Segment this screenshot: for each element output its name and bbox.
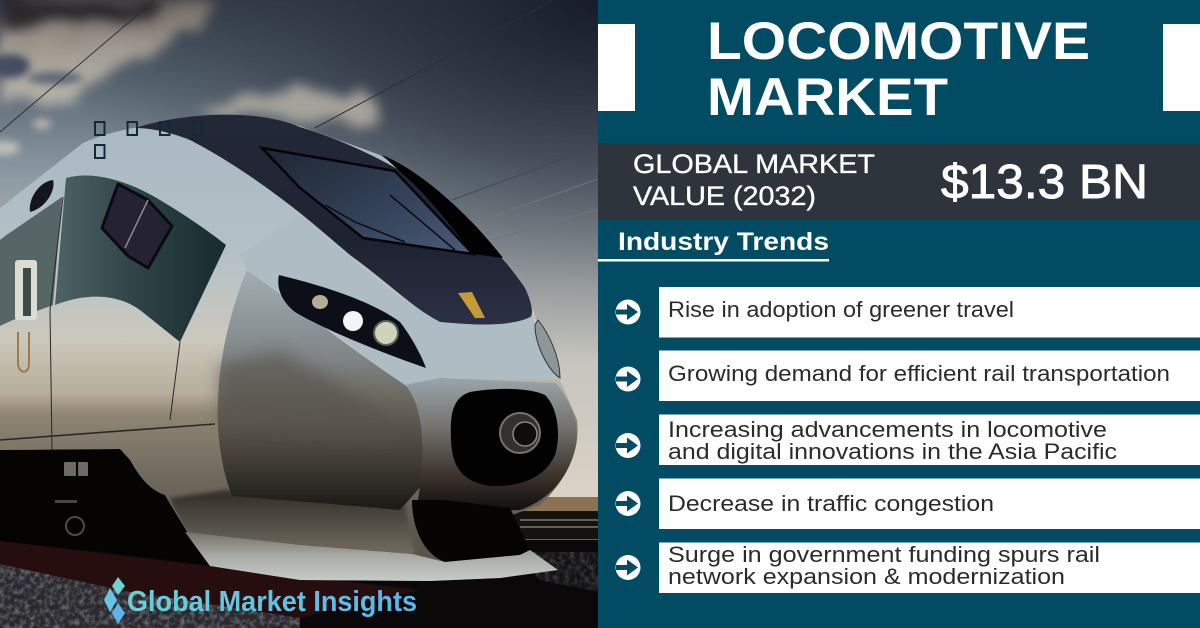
lower nose [405,378,577,512]
overhead wires [0,0,598,240]
rear side panel [0,197,62,326]
right white accent [1163,24,1200,111]
window divider [125,200,148,248]
cloud reflection on panel [210,345,360,417]
left white accent [598,24,635,111]
front skirt [185,532,558,581]
camera lens [500,413,540,453]
title [707,12,1090,127]
under-body bogie [0,449,191,542]
body seams [0,197,215,450]
trend text: and digital innovations in the Asia Pacific [668,439,1117,464]
door handle [15,260,37,320]
trend row 5 [616,542,1200,593]
side lamp [535,320,560,378]
headlights [312,295,398,345]
trend row 4 [616,478,1200,529]
lower body shadow [170,490,415,556]
market value band [598,143,1200,220]
trend row 3 [616,414,1200,465]
icon: arrow [616,300,640,324]
placeholder glyph boxes [95,122,202,158]
wipers [325,195,455,250]
clouds [0,0,380,155]
icon: arrow [616,433,640,458]
title: LOCOMOTIVE [707,12,1090,71]
trend text [668,542,1100,589]
under nose block [412,500,530,562]
market value figure: $13.3 BN [941,156,1148,209]
panel: train photograph [0,0,598,628]
sky background [0,0,598,532]
trend text: Rise in adoption of greener travel [668,297,1014,322]
bogie detail [55,462,88,535]
headlamp cavity [451,389,558,486]
logo: Global Market Insights [104,577,417,624]
side nose panel [218,270,424,510]
icon: arrow [616,366,640,392]
black windshield frame [382,155,503,258]
train body [0,115,578,581]
section heading: industry trends: Industry Trends [618,228,829,256]
logo wordmark: Global Market Insights [127,586,417,618]
side window [102,184,172,268]
gold badge [458,292,485,318]
windshield glass [262,148,473,254]
trend text [668,417,1117,464]
side dark window band [55,175,226,342]
panel: market information [598,0,1200,628]
front nose cap [242,258,560,385]
icon: arrow [616,491,640,516]
trend row 1 [616,287,1200,338]
gold door handle [18,332,29,372]
icon: arrow [616,555,640,580]
dark cab mask [135,115,532,325]
market value label: VALUE (2032) [633,181,816,211]
title: MARKET [707,68,948,127]
trend text: Decrease in traffic congestion [668,491,994,516]
trend text: network expansion & modernization [668,564,1065,589]
trend text: Surge in government funding spurs rail [668,542,1100,567]
market value label [633,149,875,211]
small roof vent [30,180,54,212]
trend text: Increasing advancements in locomotive [668,417,1107,442]
market value label: GLOBAL MARKET [633,149,875,179]
distant rail track [513,497,598,540]
headlight strip [278,275,426,368]
ground and ballast [0,540,598,628]
logo diamonds [104,577,125,624]
trend text: Growing demand for efficient rail transportation [668,361,1170,386]
trend row 2 [616,350,1200,401]
